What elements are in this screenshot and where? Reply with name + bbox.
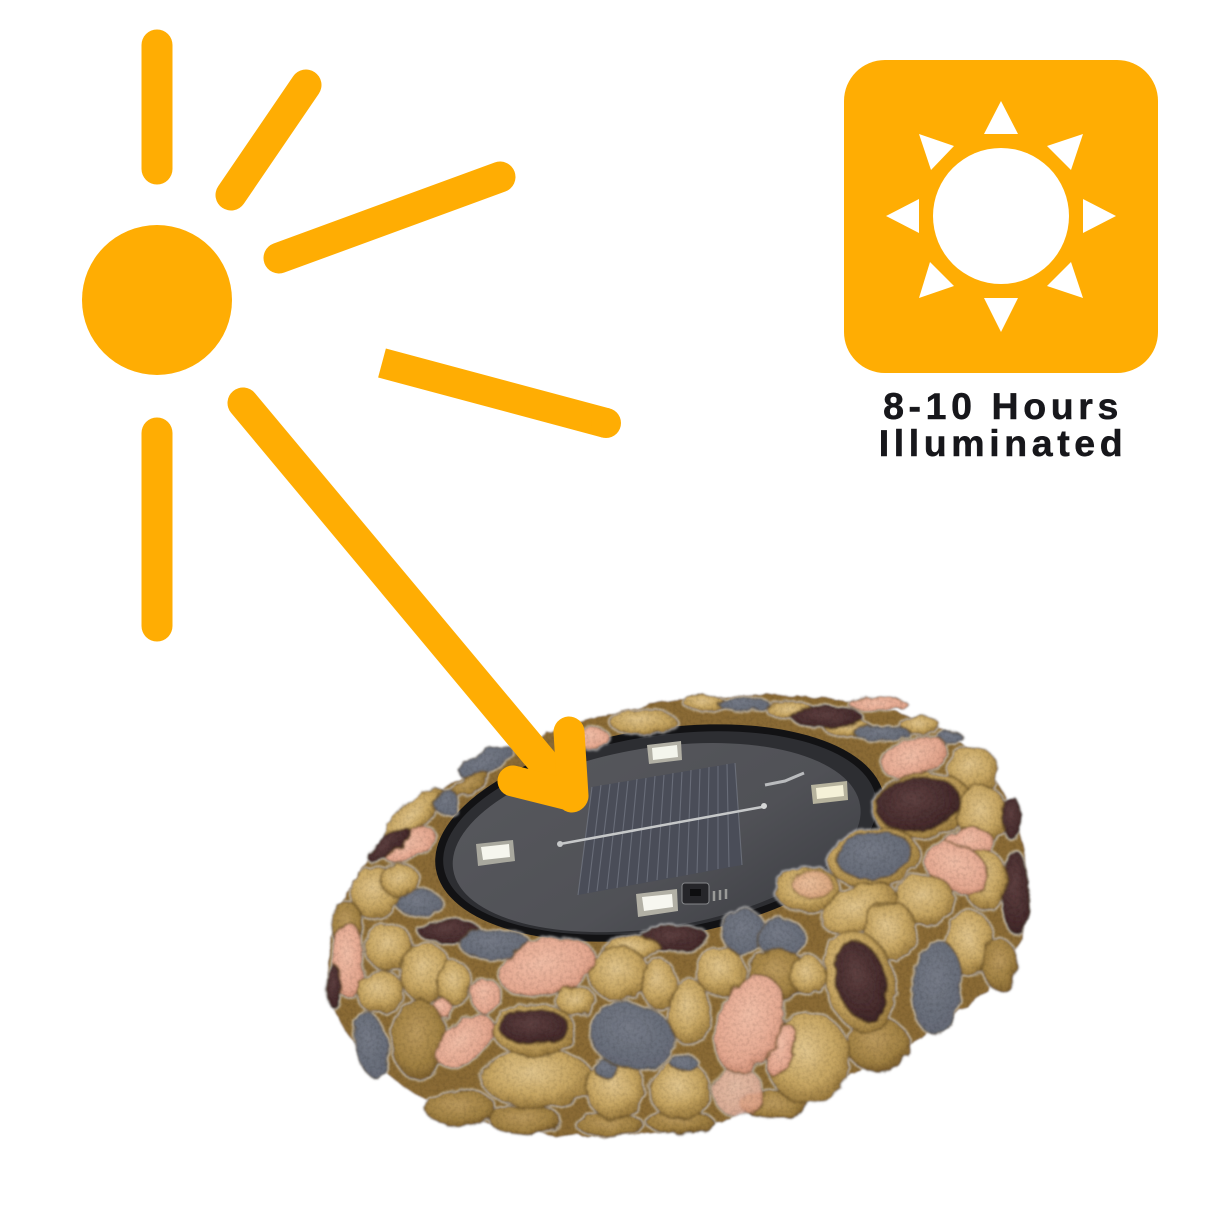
caption: hours illuminated: 8-10 Hours [883,385,1123,427]
badge: illumination time [844,60,1158,373]
ray upper right [231,85,306,195]
ray up [142,45,172,169]
stone ring base [326,694,1030,1138]
solar panel housing [420,695,900,971]
sun with rays [82,45,621,797]
ray down [142,433,172,626]
caption: hours illuminated: Illuminated [879,422,1127,464]
ray right upper [279,177,500,258]
ray right lower [382,363,621,438]
arrow to solar panel [243,403,573,797]
pebbles [326,695,1030,1137]
solar cell grid [578,763,742,895]
sun disc [82,225,232,375]
solar cell busbar [557,773,804,847]
caption: hours illuminated [879,385,1127,464]
switch [682,883,726,904]
icon: sun [886,101,1116,332]
LEDs [476,741,848,917]
product: stone solar light [326,694,1030,1138]
